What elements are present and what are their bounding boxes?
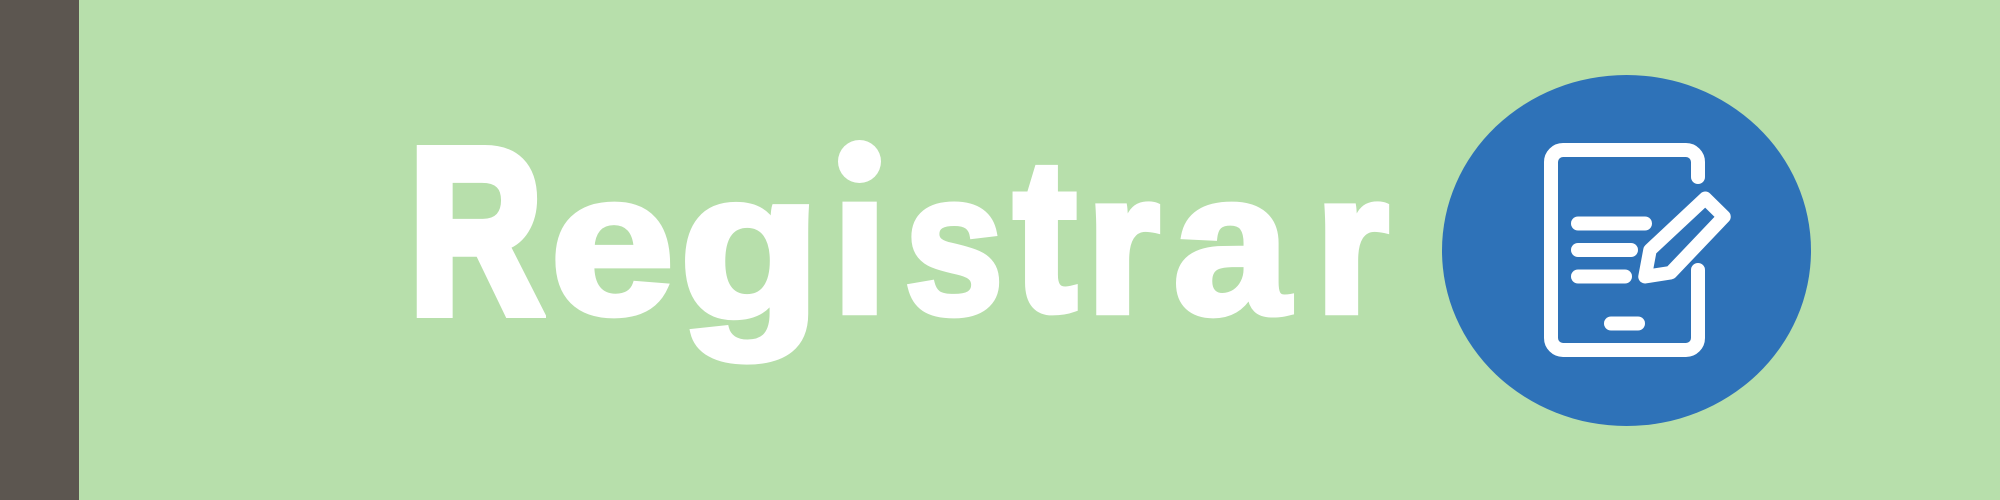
document text lines [1578, 224, 1645, 324]
title: Registrar: i [824, 122, 894, 363]
title: Registrar: R [408, 101, 542, 363]
pencil [1645, 198, 1724, 277]
title: Registrar: s [904, 132, 1004, 358]
title: Registrar [416, 145, 1390, 365]
blue circle [1442, 75, 1811, 426]
dot of the letter i [838, 140, 881, 183]
title: Registrar: r [1316, 135, 1388, 355]
title: Registrar: g [679, 129, 821, 363]
title: Registrar: t [1014, 116, 1077, 357]
title: Registrar: a [1173, 132, 1289, 358]
title: Registrar: r [1086, 135, 1159, 355]
left dark sidebar strip [0, 0, 79, 500]
title: Registrar: e [550, 132, 674, 358]
document outline [1551, 150, 1698, 350]
